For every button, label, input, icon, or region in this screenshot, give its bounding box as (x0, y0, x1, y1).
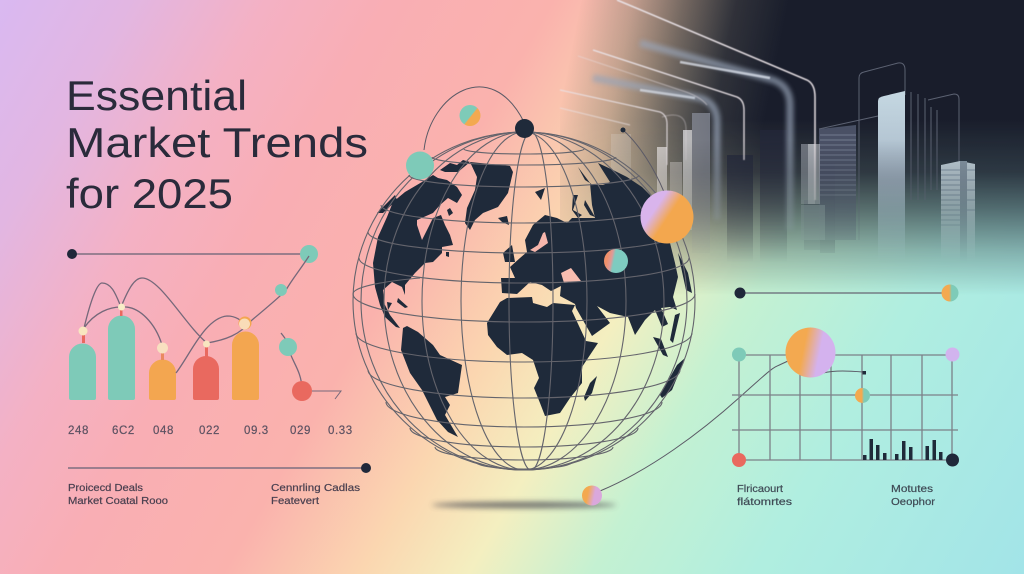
Asia-Pacific islands (678, 253, 692, 293)
bar value labels: 029 (290, 425, 311, 437)
dark skyline sky (560, 0, 1024, 300)
nodes (732, 348, 746, 362)
UK (503, 245, 515, 262)
bar value labels: 09.3 (244, 425, 269, 437)
right top rule (734, 284, 958, 302)
left chart bottom rule (68, 463, 371, 473)
teal sphere (406, 152, 434, 180)
arctic islands (440, 160, 470, 172)
continents (373, 160, 692, 437)
mid-distance dark towers (727, 155, 835, 256)
bar value labels: 0.33 (328, 425, 353, 437)
right captions right column: Oeophor (891, 497, 936, 508)
striped building (819, 125, 856, 240)
right captions left column: Flricaourt (737, 484, 783, 495)
orbit lines (424, 87, 790, 491)
right grid chart (732, 328, 960, 467)
top two-tone sphere (460, 105, 480, 126)
right captions right column (891, 484, 936, 508)
globe pole node (515, 119, 534, 138)
North America (373, 175, 462, 307)
connector (823, 371, 863, 373)
right captions right column: Motutes (891, 484, 933, 495)
bar value labels: 048 (153, 425, 174, 437)
title: Market Trends (66, 119, 368, 166)
right captions left column (737, 484, 792, 508)
blurred light trails (593, 43, 790, 230)
thin light lines (560, 0, 815, 200)
title: Essential (66, 72, 247, 119)
bar value labels: 022 (199, 425, 220, 437)
Eurasia (501, 163, 678, 336)
title (66, 72, 368, 217)
Novaya Zemlya (572, 195, 582, 218)
left captions: Proicecd Deals (68, 483, 143, 494)
bar value labels: 6C2 (112, 425, 135, 437)
trend curves (84, 256, 309, 388)
Svalbard (535, 188, 545, 200)
grid lines (732, 355, 958, 460)
left chart top rule (67, 245, 318, 263)
pale tower cluster (801, 144, 825, 240)
city skyline with light trails (560, 0, 975, 256)
distant pale buildings (611, 113, 710, 230)
bars (69, 316, 259, 400)
Africa (487, 297, 598, 416)
South America (401, 326, 462, 437)
baseline tail (312, 391, 341, 399)
graticule (353, 132, 695, 470)
globe (353, 132, 695, 470)
markers (78, 284, 312, 401)
right captions left column: flátomrtes (737, 497, 792, 508)
large lavender orange sphere (640, 190, 694, 244)
small orbit dot (620, 128, 626, 132)
bar value labels (68, 425, 353, 437)
left bar chart (69, 256, 341, 401)
mini bars (863, 439, 942, 460)
meridians (353, 132, 695, 470)
left captions (68, 483, 168, 507)
globe shadow (432, 502, 616, 508)
Central America (380, 305, 400, 328)
middle captions: Featevert (271, 496, 319, 507)
bar value labels: 248 (68, 425, 89, 437)
left captions: Market Coatal Rooo (68, 496, 168, 507)
outlined towers (819, 63, 959, 240)
bottom sphere (582, 486, 602, 506)
Madagascar (584, 376, 597, 401)
middle captions: Cennrling Cadlas (271, 483, 360, 494)
mid globe sphere (604, 249, 628, 273)
middle captions (271, 483, 360, 507)
right striped tower (941, 161, 975, 248)
title: for 2025 (66, 170, 233, 217)
bright main tower (878, 91, 905, 245)
parallels (464, 149, 584, 154)
Iceland (498, 216, 509, 225)
inland seas (561, 268, 581, 283)
Greenland (465, 162, 513, 230)
